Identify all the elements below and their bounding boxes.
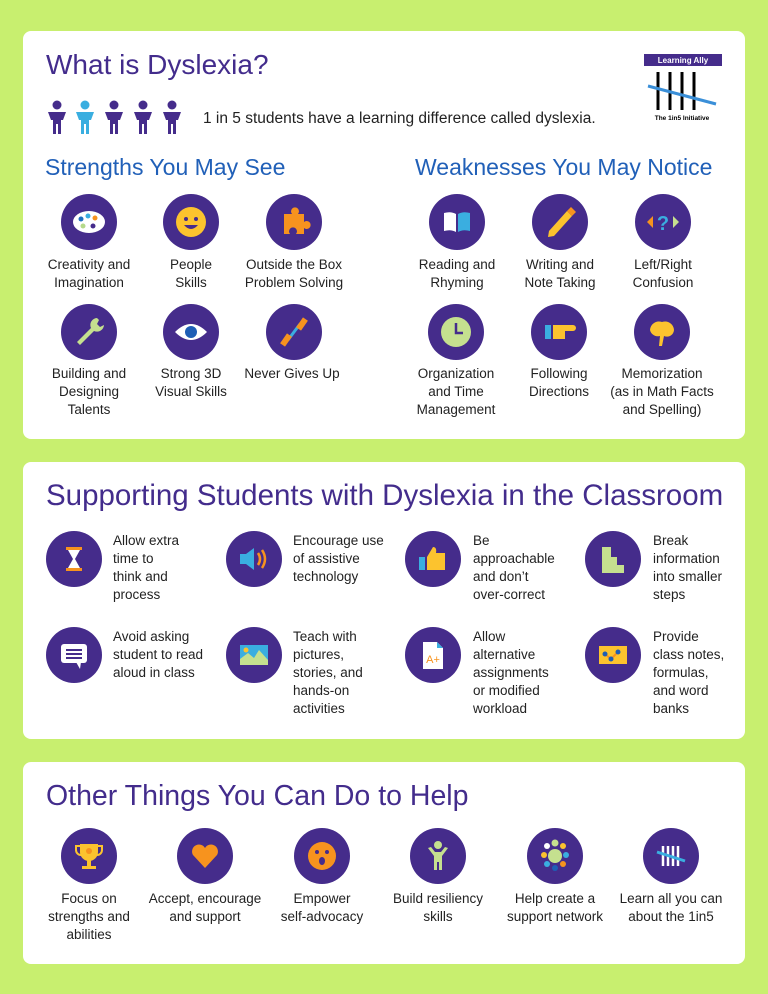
text: Break <box>653 533 688 548</box>
text: People <box>170 257 212 272</box>
logo: learning ally: Learning Ally <box>658 56 709 65</box>
text: Learn all you can <box>620 891 722 906</box>
text: and support <box>169 909 241 924</box>
tip: pictures <box>226 627 363 716</box>
weakness: organization <box>417 304 496 417</box>
text: A+ <box>426 654 440 666</box>
text: into smaller <box>653 569 722 584</box>
text: steps <box>653 587 685 602</box>
text: Management <box>417 402 495 417</box>
text: about the 1in5 <box>628 909 714 924</box>
strength: creativity <box>48 194 130 290</box>
text: workload <box>473 701 527 716</box>
icon: five people <box>48 100 181 134</box>
weakness: directions <box>529 304 589 399</box>
text: Avoid asking <box>113 629 189 644</box>
text: Directions <box>529 384 589 399</box>
strength: outside the box <box>245 194 343 290</box>
text: Be <box>473 533 490 548</box>
tip: read aloud <box>46 627 203 683</box>
text: Teach with <box>293 629 357 644</box>
text: strengths and <box>48 909 130 924</box>
text: time to <box>113 551 154 566</box>
text: pictures, <box>293 647 344 662</box>
text: (as in Math Facts <box>610 384 714 399</box>
text: student to read <box>113 647 203 662</box>
text: activities <box>293 701 345 716</box>
text: hands-on <box>293 683 349 698</box>
text: Talents <box>68 402 110 417</box>
heading: strengths: Strengths You May See <box>45 154 285 180</box>
strength: 3D visual <box>155 304 227 399</box>
text: Help create a <box>515 891 595 906</box>
text: Encourage use <box>293 533 384 548</box>
text: Accept, encourage <box>149 891 261 906</box>
tip: approachable <box>405 531 555 602</box>
text: Skills <box>175 275 207 290</box>
text: Creativity and <box>48 257 130 272</box>
text: Problem Solving <box>245 275 343 290</box>
panel: what is dyslexia <box>23 31 745 439</box>
text: Provide <box>653 629 699 644</box>
text: Allow extra <box>113 533 179 548</box>
heading: weaknesses: Weaknesses You May Notice <box>415 154 712 180</box>
heading: supporting: Supporting Students with Dyslexia in the Classroom <box>46 479 723 512</box>
title: What is Dyslexia? <box>46 49 269 80</box>
help: focus on strengths <box>48 828 130 942</box>
text: aloud in class <box>113 665 195 680</box>
text: think and <box>113 569 168 584</box>
strength: never gives up <box>244 304 340 381</box>
text: support network <box>507 909 603 924</box>
text: information <box>653 551 720 566</box>
heading: other things: Other Things You Can Do to Help <box>46 780 468 812</box>
text: Left/Right <box>634 257 692 272</box>
text: formulas, <box>653 665 709 680</box>
text: over-correct <box>473 587 545 602</box>
help: learn about 1in5 <box>620 828 722 924</box>
text: Empower <box>293 891 351 906</box>
text: or modified <box>473 683 540 698</box>
help: support network <box>507 828 603 924</box>
text: Building and <box>52 366 126 381</box>
tip: alternative assignments <box>405 627 549 716</box>
text: and word <box>653 683 709 698</box>
tip: class notes <box>585 627 724 716</box>
text: stories, and <box>293 665 363 680</box>
text: Note Taking <box>524 275 596 290</box>
text: abilities <box>66 927 112 942</box>
text: Never Gives Up <box>244 366 340 381</box>
strength: building <box>52 304 126 417</box>
help: self-advocacy <box>281 828 364 924</box>
text: Allow <box>473 629 505 644</box>
text: Writing and <box>526 257 594 272</box>
text: of assistive <box>293 551 360 566</box>
text: Organization <box>418 366 494 381</box>
text: Focus on <box>61 891 117 906</box>
panel: other things <box>23 762 745 964</box>
text: approachable <box>473 551 555 566</box>
weakness: left/right <box>633 194 693 290</box>
text: banks <box>653 701 689 716</box>
text: self-advocacy <box>281 909 363 924</box>
text: Memorization <box>621 366 703 381</box>
text: Following <box>530 366 588 381</box>
text: ? <box>657 213 669 235</box>
text: assignments <box>473 665 549 680</box>
tip: extra time <box>46 531 179 602</box>
text: Confusion <box>633 275 693 290</box>
logo: learning ally: The 1in5 Initiative <box>655 115 710 122</box>
tip: assistive tech <box>226 531 384 587</box>
text: Reading and <box>419 257 495 272</box>
text: 1 in 5: 1 in 5 students have a learning difference called dyslexia. <box>203 110 596 127</box>
strength: people skills <box>163 194 219 290</box>
logo: learning ally <box>644 54 722 122</box>
weakness: writing <box>524 194 596 290</box>
text: Visual Skills <box>155 384 227 399</box>
text: and Time <box>428 384 484 399</box>
text: technology <box>293 569 358 584</box>
text: Strong 3D <box>161 366 221 381</box>
text: Build resiliency <box>393 891 483 906</box>
text: Designing <box>59 384 119 399</box>
text: class notes, <box>653 647 724 662</box>
tip: smaller steps <box>585 531 722 602</box>
help: resiliency <box>393 828 483 924</box>
text: skills <box>423 909 453 924</box>
help: accept <box>148 828 261 924</box>
text: Outside the Box <box>246 257 342 272</box>
panel: supporting students <box>23 462 745 739</box>
text: Imagination <box>54 275 124 290</box>
text: and Spelling) <box>623 402 701 417</box>
weakness: memorization <box>610 304 714 417</box>
text: and don’t <box>473 569 529 584</box>
text: Rhyming <box>430 275 484 290</box>
text: process <box>113 587 160 602</box>
text: alternative <box>473 647 535 662</box>
weakness: reading <box>419 194 495 290</box>
